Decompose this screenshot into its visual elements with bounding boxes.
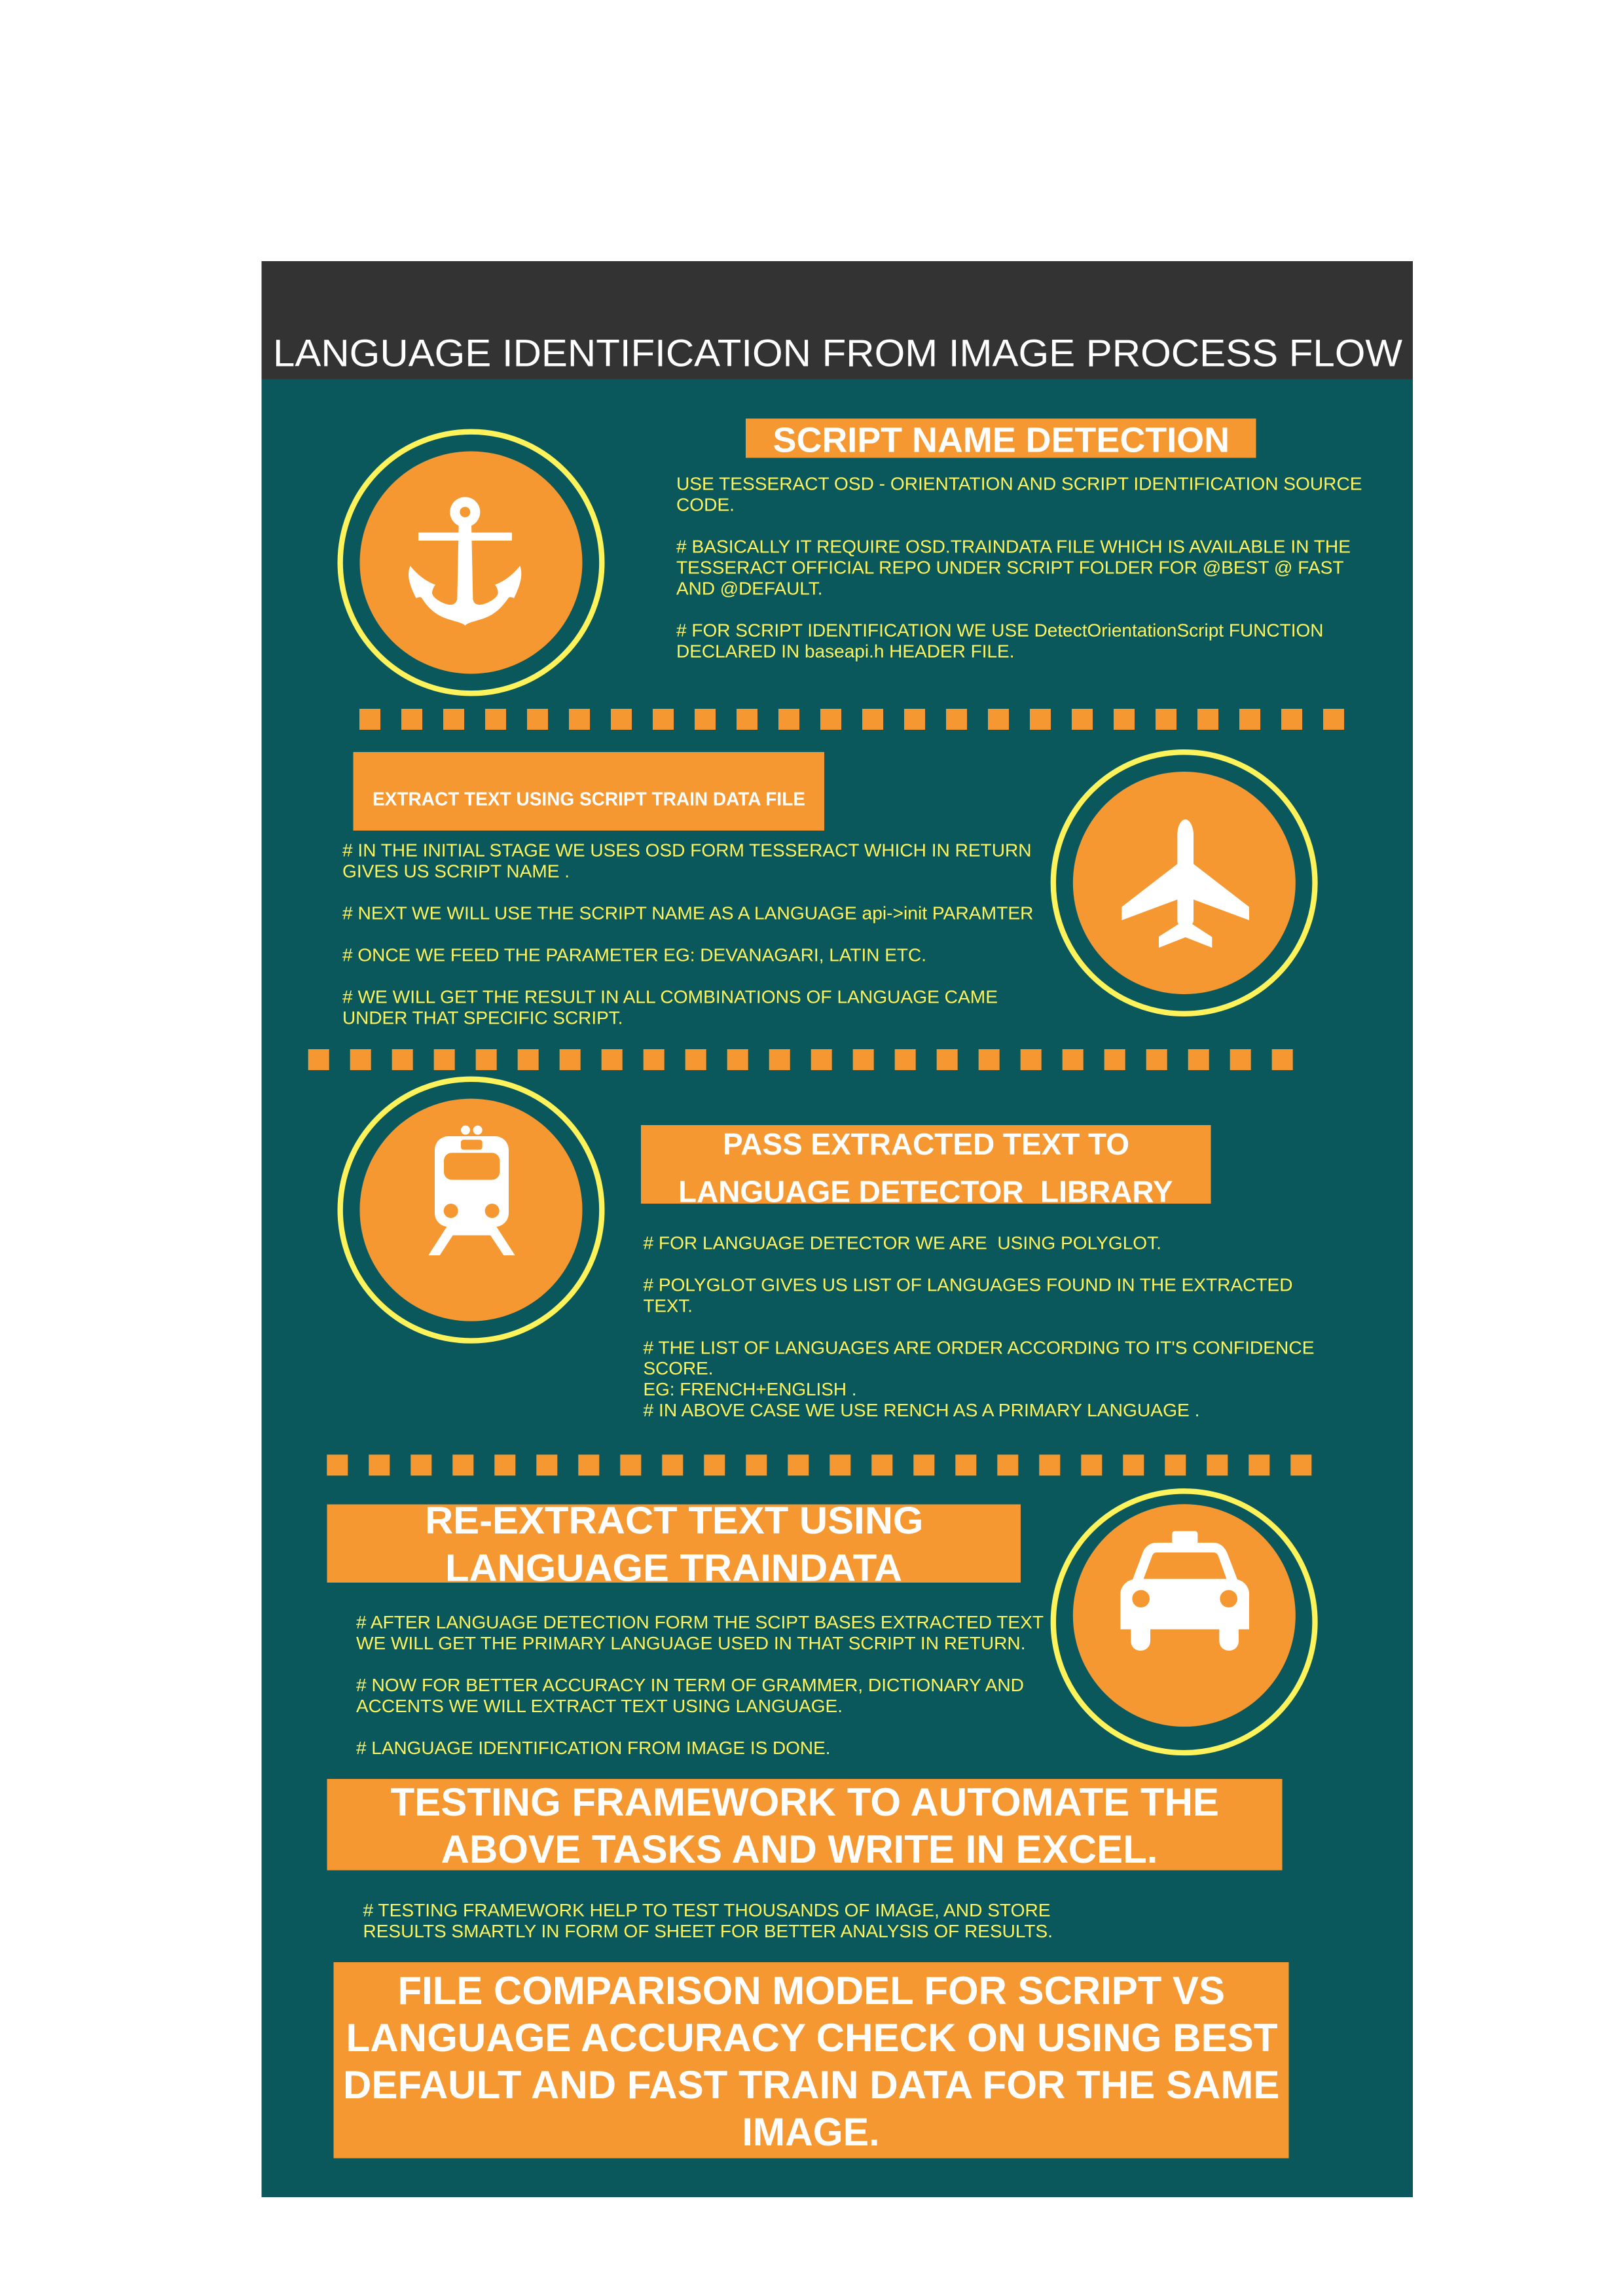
header band with title: LANGUAGE IDENTIFICATION FROM IMAGE PROCESS FLOW <box>273 332 1402 374</box>
text block: extract text: # NEXT WE WILL USE THE SCRIPT NAME AS A LANGUAGE api->init PARAMTER <box>342 903 1033 923</box>
icon: airplane <box>1053 752 1315 1014</box>
heading: script name detection: SCRIPT NAME DETECTION <box>773 420 1230 459</box>
text block: language detector: # IN ABOVE CASE WE USE RENCH AS A PRIMARY LANGUAGE . <box>643 1400 1199 1420</box>
heading: pass extracted text: PASS EXTRACTED TEXT TO <box>723 1127 1129 1161</box>
heading: testing framework: TESTING FRAMEWORK TO AUTOMATE THE <box>390 1780 1219 1824</box>
text block: testing framework: # TESTING FRAMEWORK HELP TO TEST THOUSANDS OF IMAGE, AND STORE <box>363 1900 1050 1920</box>
text block: testing framework <box>363 1900 1053 1941</box>
text block: language detector: TEXT. <box>643 1296 693 1316</box>
text block: script name detection: CODE. <box>676 495 735 514</box>
heading: testing framework <box>327 1779 1282 1871</box>
text block: extract text: # WE WILL GET THE RESULT IN ALL COMBINATIONS OF LANGUAGE CAME <box>342 987 998 1007</box>
section 6: file comparison model: DEFAULT AND FAST TRAIN DATA FOR THE SAME <box>343 2063 1279 2107</box>
text block: re-extract text <box>356 1612 1044 1758</box>
section 6: file comparison model <box>334 1962 1288 2159</box>
text block: re-extract text: # NOW FOR BETTER ACCURACY IN TERM OF GRAMMER, DICTIONARY AND <box>356 1675 1024 1695</box>
section 6: file comparison model: IMAGE. <box>742 2110 880 2154</box>
icon: taxi <box>1053 1491 1315 1753</box>
text block: script name detection: USE TESSERACT OSD - ORIENTATION AND SCRIPT IDENTIFICATION SOURCE <box>676 474 1362 493</box>
icon: train <box>340 1079 602 1340</box>
text block: language detector: # POLYGLOT GIVES US LIST OF LANGUAGES FOUND IN THE EXTRACTED <box>643 1275 1292 1295</box>
text block: re-extract text: # AFTER LANGUAGE DETECTION FORM THE SCIPT BASES EXTRACTED TEXT <box>356 1612 1044 1632</box>
heading: re-extract text <box>327 1499 1021 1589</box>
text block: language detector <box>643 1233 1315 1420</box>
icon: anchor <box>340 432 602 693</box>
heading: pass extracted text <box>641 1125 1211 1208</box>
text block: script name detection: TESSERACT OFFICIAL REPO UNDER SCRIPT FOLDER FOR @BEST @ FAST <box>676 558 1343 577</box>
text block: language detector: EG: FRENCH+ENGLISH . <box>643 1379 856 1399</box>
text block: extract text: UNDER THAT SPECIFIC SCRIPT. <box>342 1008 623 1028</box>
section 5: testing framework <box>327 1779 1282 1941</box>
text block: extract text: GIVES US SCRIPT NAME . <box>342 861 570 881</box>
section 2: extract text using script train data <box>342 752 1315 1028</box>
text block: extract text: # IN THE INITIAL STAGE WE USES OSD FORM TESSERACT WHICH IN RETURN <box>342 840 1032 860</box>
text block: language detector: SCORE. <box>643 1358 714 1378</box>
header band with title <box>262 261 1413 380</box>
section 1: script name detection <box>340 419 1362 693</box>
text block: script name detection: AND @DEFAULT. <box>676 579 822 598</box>
text block: extract text: # ONCE WE FEED THE PARAMETER EG: DEVANAGARI, LATIN ETC. <box>342 945 926 965</box>
heading: pass extracted text: LANGUAGE DETECTOR LIBRARY <box>678 1174 1173 1208</box>
section 6: file comparison model: FILE COMPARISON MODEL FOR SCRIPT VS <box>398 1969 1225 2013</box>
text block: testing framework: RESULTS SMARTLY IN FORM OF SHEET FOR BETTER ANALYSIS OF RESULTS. <box>363 1921 1053 1941</box>
heading: testing framework: ABOVE TASKS AND WRITE IN EXCEL. <box>441 1827 1158 1871</box>
section 3: pass extracted text to language detector <box>340 1079 1314 1420</box>
text block: script name detection: # BASICALLY IT REQUIRE OSD.TRAINDATA FILE WHICH IS AVAILABLE IN THE <box>676 537 1351 556</box>
panel: teal background <box>262 261 1413 2197</box>
text block: extract text <box>342 840 1033 1028</box>
section 6: file comparison model: LANGUAGE ACCURACY CHECK ON USING BEST <box>346 2016 1278 2060</box>
text block: re-extract text: ACCENTS WE WILL EXTRACT TEXT USING LANGUAGE. <box>356 1696 843 1716</box>
text block: script name detection: DECLARED IN baseapi.h HEADER FILE. <box>676 641 1015 661</box>
section 4: re-extract text <box>327 1491 1315 1758</box>
heading: re-extract text: LANGUAGE TRAINDATA <box>445 1547 902 1589</box>
heading: re-extract text: RE-EXTRACT TEXT USING <box>425 1499 923 1542</box>
text block: script name detection <box>676 474 1362 661</box>
text block: language detector: # FOR LANGUAGE DETECTOR WE ARE USING POLYGLOT. <box>643 1233 1161 1253</box>
text block: language detector: # THE LIST OF LANGUAGES ARE ORDER ACCORDING TO IT'S CONFIDENCE <box>643 1338 1315 1357</box>
heading: extract text: EXTRACT TEXT USING SCRIPT TRAIN DATA FILE <box>373 789 805 810</box>
text block: re-extract text: # LANGUAGE IDENTIFICATION FROM IMAGE IS DONE. <box>356 1738 830 1758</box>
text block: script name detection: # FOR SCRIPT IDENTIFICATION WE USE DetectOrientationScript FUNCTION <box>676 620 1324 640</box>
heading: extract text <box>354 752 824 831</box>
text block: re-extract text: WE WILL GET THE PRIMARY LANGUAGE USED IN THAT SCRIPT IN RETURN. <box>356 1633 1025 1653</box>
